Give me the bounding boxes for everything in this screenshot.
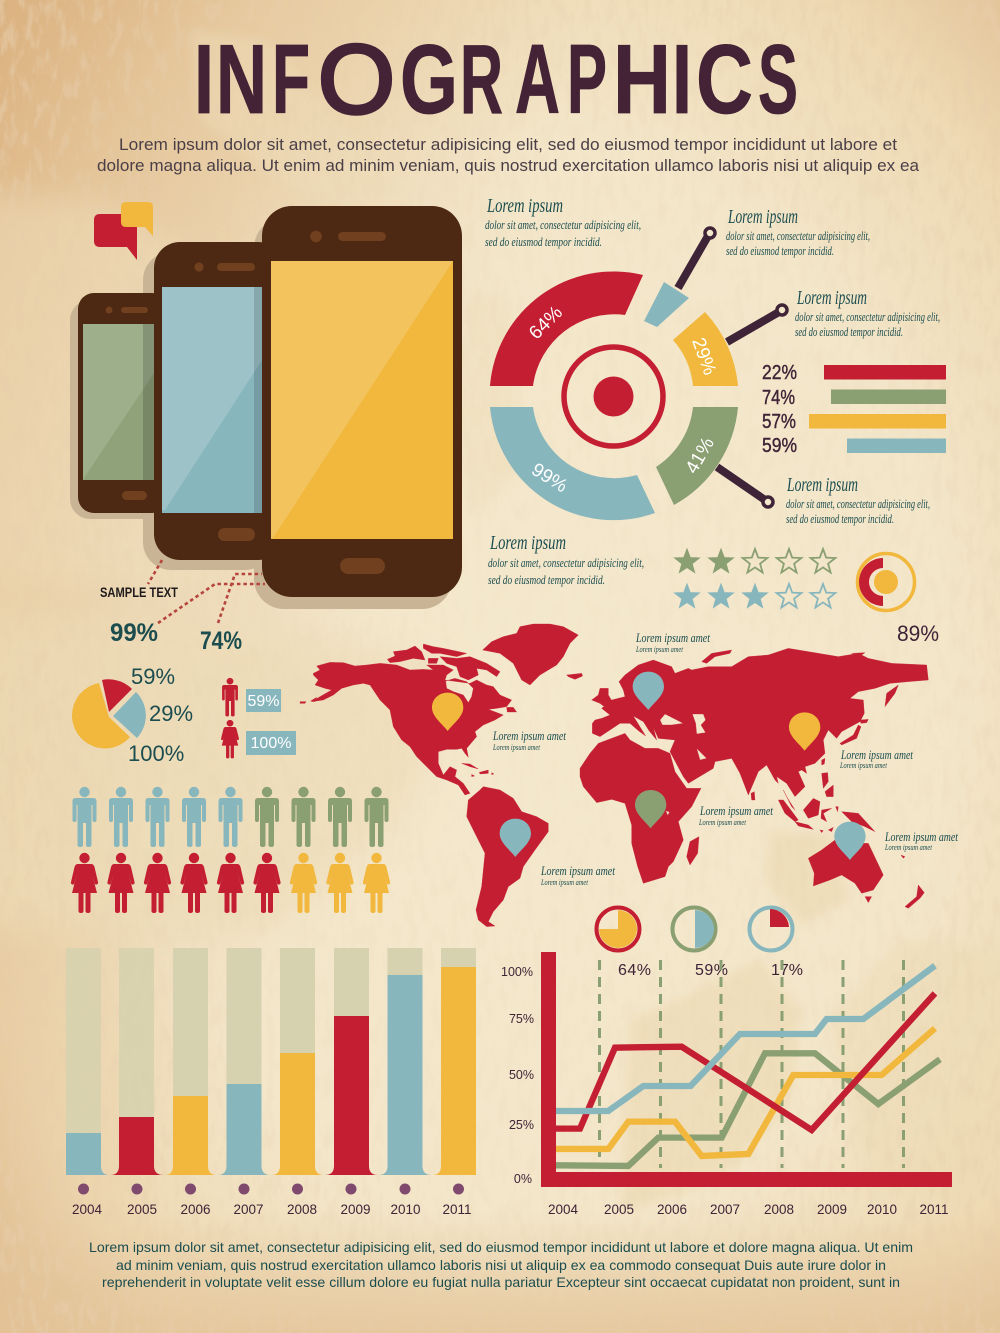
- men row: [72, 787, 388, 847]
- green stars: [675, 549, 835, 572]
- donut small blue wedge: [644, 282, 689, 327]
- data lines: [556, 966, 940, 1166]
- blue stars: [675, 584, 835, 608]
- gender stat: [221, 678, 296, 758]
- title: A: [515, 24, 560, 134]
- callout text 1: sed do eiusmod tempor incidid.: [485, 234, 602, 249]
- callout text 3: [795, 287, 940, 339]
- year labels: 2004: [72, 1202, 103, 1217]
- dashed guides: [600, 960, 904, 1168]
- title: F: [272, 24, 310, 134]
- x axis labels: 2004: [548, 1202, 579, 1217]
- female figure: [221, 720, 239, 758]
- title: R: [460, 24, 503, 134]
- Eurasia Africa Oceania: [580, 648, 928, 908]
- title: C: [696, 24, 753, 134]
- map labels: Lorem ipsum amet: [840, 747, 913, 762]
- callout text 1: Lorem ipsum: [486, 195, 563, 217]
- title: H: [613, 24, 671, 134]
- title: S: [758, 24, 798, 134]
- map labels: Lorem ipsum amet: [492, 743, 541, 752]
- gauge 89 percent: [858, 554, 939, 646]
- year labels: 2009: [340, 1202, 371, 1217]
- bar tracks: [66, 948, 476, 1175]
- large yellow phone: [262, 206, 462, 597]
- donut percent labels: 64%: [525, 302, 567, 344]
- year labels: [72, 1202, 472, 1217]
- callout text 1: [485, 195, 641, 249]
- intro text: [97, 135, 920, 175]
- Americas and Greenland: [300, 624, 583, 927]
- clock pie 17: 17%: [771, 962, 803, 979]
- y axis labels: 100%: [501, 965, 533, 979]
- callout connectors: [678, 228, 787, 507]
- small green phone: [78, 293, 168, 513]
- year labels: 2006: [180, 1202, 211, 1217]
- callout text 2: Lorem ipsum: [727, 206, 798, 228]
- title: P: [567, 24, 607, 134]
- map labels: Lorem ipsum amet: [492, 728, 566, 743]
- map labels: [492, 630, 958, 887]
- intro text: dolore magna aliqua. Ut enim ad minim veniam, quis nostrud exercitation ullamco laboris nisi ut aliquip ex ea: [97, 156, 920, 175]
- callout text 2: [726, 206, 870, 258]
- intro text: Lorem ipsum dolor sit amet, consectetur adipisicing elit, sed do eiusmod tempor incididunt ut labore et: [119, 135, 897, 154]
- line chart: [501, 952, 952, 1217]
- footer text: Lorem ipsum dolor sit amet, consectetur adipisicing elit, sed do eiusmod tempor incididunt ut labore et dolore magna aliqua. Ut enim: [89, 1239, 913, 1255]
- gauge 89 percent: 89%: [897, 621, 939, 646]
- year labels: 2005: [127, 1202, 157, 1217]
- donut blue segment: [490, 407, 655, 520]
- x axis labels: 2005: [604, 1202, 634, 1217]
- bar chart: [66, 948, 476, 1217]
- bar labels: 59%: [762, 435, 797, 457]
- callout text 2: sed do eiusmod tempor incidid.: [726, 243, 834, 258]
- year labels: 2010: [390, 1202, 421, 1217]
- bar labels: 74%: [762, 387, 795, 409]
- clock pie 59: 59%: [695, 962, 728, 979]
- donut centre target: [564, 347, 663, 446]
- map labels: Lorem ipsum amet: [540, 863, 615, 878]
- callout text 4: Lorem ipsum: [786, 474, 858, 496]
- donut percent labels: 29%: [687, 335, 720, 378]
- bar labels: 22%: [762, 362, 797, 384]
- bar values: [66, 967, 476, 1175]
- bar labels: 57%: [762, 411, 796, 433]
- x axis labels: 2006: [657, 1202, 687, 1217]
- people pictogram: [71, 787, 390, 913]
- pins on Eurasia Africa Oceania: [633, 672, 866, 860]
- footer text: ad minim veniam, quis nostrud exercitation ullamco laboris nisi ut aliquip ex ea commodo consequat Duis aute irure dolor in: [116, 1257, 886, 1273]
- y axis labels: 50%: [509, 1068, 534, 1082]
- donut percent labels: 41%: [682, 434, 719, 477]
- x axis labels: 2010: [867, 1202, 897, 1217]
- title: I: [194, 24, 214, 134]
- stat badge 100: 100%: [251, 735, 291, 752]
- title: I: [672, 24, 692, 134]
- pie labels: 100%: [128, 741, 184, 766]
- year labels: 2008: [287, 1202, 317, 1217]
- y axis labels: 75%: [509, 1012, 534, 1026]
- x axis labels: 2011: [919, 1202, 949, 1217]
- callout text 1: dolor sit amet, consectetur adipisicing elit,: [485, 217, 641, 232]
- pie labels: [128, 664, 193, 766]
- year labels: 2011: [442, 1202, 472, 1217]
- callout text 4: sed do eiusmod tempor incidid.: [786, 511, 894, 526]
- map labels: Lorem ipsum amet: [884, 843, 933, 852]
- year labels: 2007: [233, 1202, 264, 1217]
- donut green segment: [656, 407, 738, 505]
- stat badge 59: 59%: [247, 693, 280, 710]
- map labels: Lorem ipsum amet: [635, 630, 710, 645]
- clock pie 64: 64%: [618, 962, 651, 979]
- x axis labels: 2007: [710, 1202, 740, 1217]
- callout text 5: sed do eiusmod tempor incidid.: [488, 572, 605, 587]
- map labels: Lorem ipsum amet: [884, 829, 958, 844]
- y axis labels: 0%: [514, 1172, 532, 1186]
- male figure: [222, 678, 238, 716]
- clock pies: [596, 908, 803, 979]
- x axis labels: [548, 1202, 949, 1217]
- title: G: [400, 24, 458, 134]
- star ratings: [675, 549, 835, 608]
- footer text: [89, 1239, 913, 1290]
- pins on the Americas: [432, 693, 531, 857]
- callout text 5: dolor sit amet, consectetur adipisicing elit,: [488, 555, 644, 570]
- callout text 2: dolor sit amet, consectetur adipisicing elit,: [726, 228, 870, 243]
- callout text 4: [786, 474, 930, 526]
- bar labels: [762, 362, 797, 457]
- donut red segment: [490, 271, 643, 386]
- map labels: Lorem ipsum amet: [699, 803, 773, 818]
- callout text 3: Lorem ipsum: [796, 287, 867, 309]
- bars: [809, 365, 946, 453]
- clock pie 17: [750, 908, 803, 979]
- phones illustration: [70, 206, 462, 655]
- title: O: [318, 24, 395, 134]
- callout text 5: Lorem ipsum: [489, 532, 566, 554]
- map labels: Lorem ipsum amet: [540, 878, 589, 887]
- horizontal bars: [762, 362, 946, 457]
- map labels: Lorem ipsum amet: [839, 761, 888, 770]
- title: N: [216, 24, 267, 134]
- callout text 3: sed do eiusmod tempor incidid.: [795, 324, 903, 339]
- icon: chat bubbles: [94, 202, 153, 260]
- medium blue phone: [154, 242, 284, 560]
- sample text: SAMPLE TEXT: [100, 585, 179, 600]
- 74 percent: 74%: [200, 627, 242, 655]
- y axis labels: [501, 965, 534, 1186]
- x axis labels: 2008: [764, 1202, 794, 1217]
- pie labels: 29%: [149, 701, 193, 726]
- x axis labels: 2009: [817, 1202, 847, 1217]
- donut percent labels: [525, 302, 720, 497]
- dotted leader lines: [148, 560, 265, 623]
- map labels: Lorem ipsum amet: [635, 645, 684, 654]
- world map: [300, 624, 958, 927]
- women row: [71, 853, 390, 913]
- clock pie 59: [672, 908, 728, 979]
- y axis labels: 25%: [509, 1118, 534, 1132]
- footer text: reprehenderit in voluptate velit esse cillum dolore eu fugiat nulla pariatur Excepteur sint occaecat cupidatat non proident, sunt in: [102, 1274, 900, 1290]
- donut yellow segment: [673, 312, 738, 386]
- pie labels: 59%: [131, 664, 175, 689]
- map labels: Lorem ipsum amet: [698, 818, 747, 827]
- year dots: [78, 1184, 464, 1194]
- 99 percent: 99%: [110, 619, 158, 647]
- clock pie 64: [596, 908, 651, 979]
- axes: [541, 952, 952, 1187]
- phone shadows: [70, 218, 452, 609]
- donut percent labels: 99%: [528, 459, 571, 497]
- donut chart: [490, 271, 738, 520]
- pie chart: [72, 664, 193, 766]
- callout text 5: [488, 532, 644, 587]
